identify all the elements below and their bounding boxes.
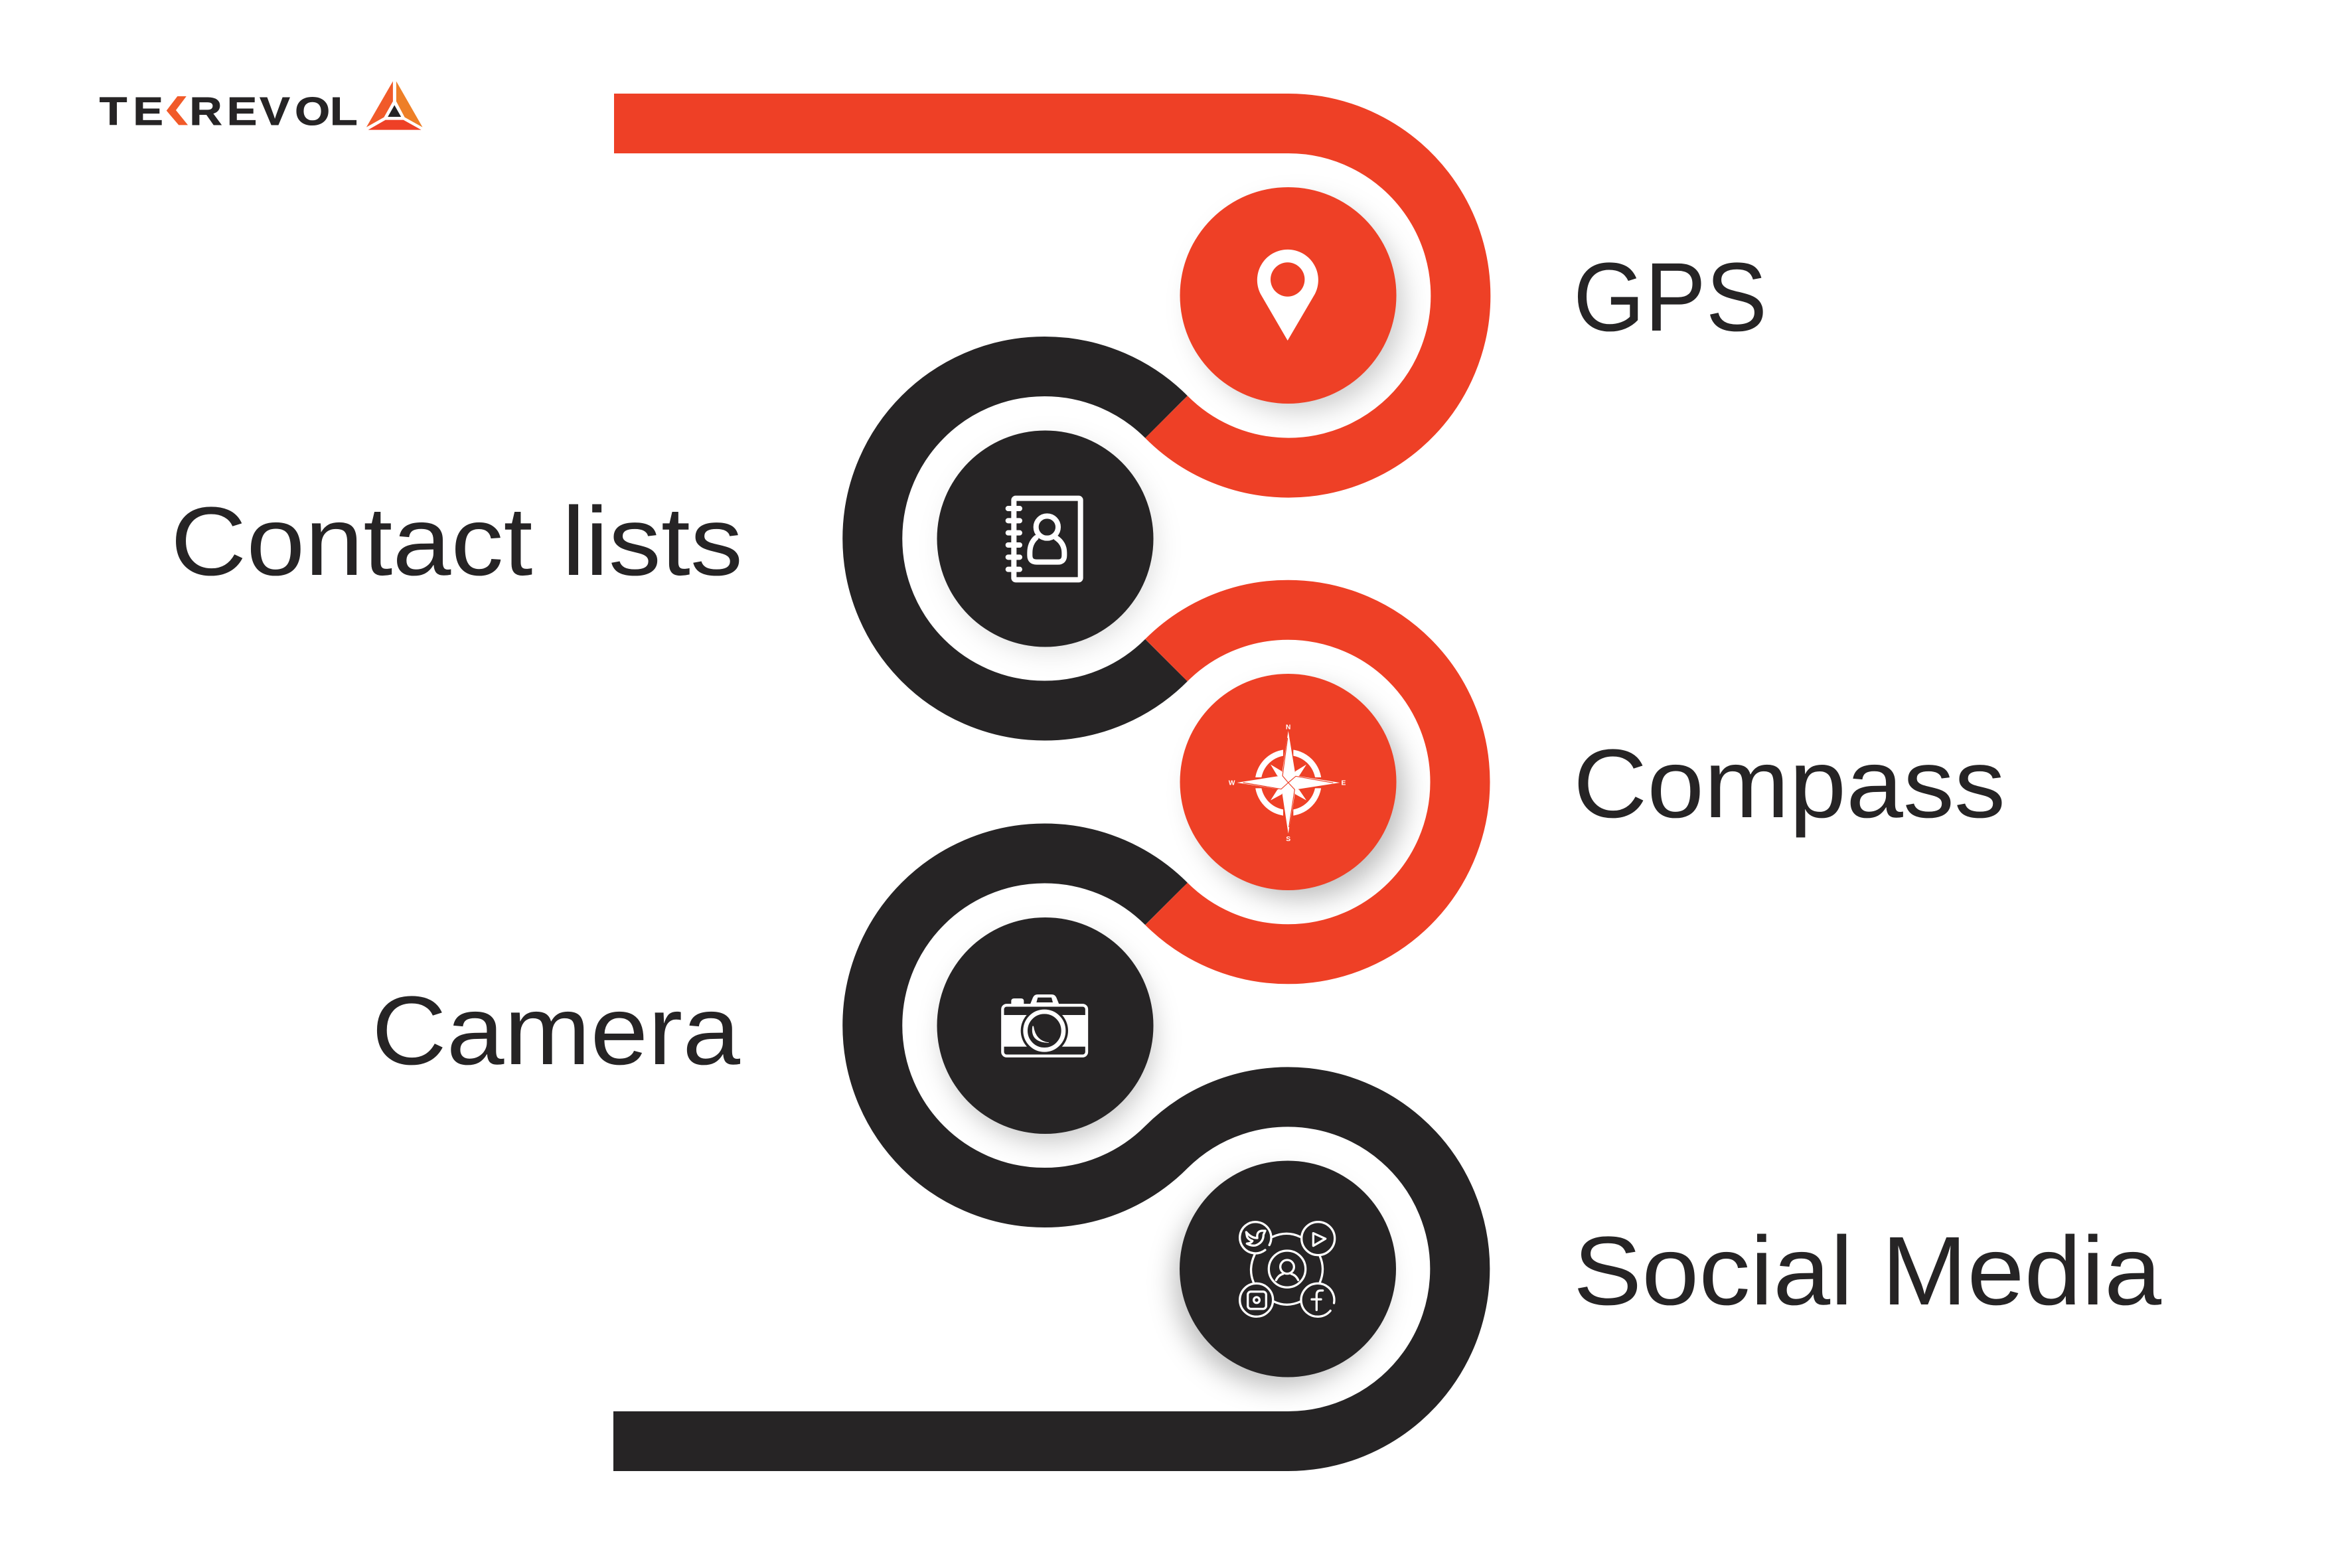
track: black segment around Contact lists bbox=[872, 366, 1166, 711]
compass letters: N bbox=[1286, 724, 1290, 732]
icon: social network bbox=[1233, 1215, 1341, 1324]
label: Compass: Compass bbox=[1573, 730, 2005, 838]
logo: TekRevol bbox=[100, 81, 423, 133]
compass letters bbox=[1229, 724, 1346, 843]
label: Camera: Camera bbox=[372, 977, 740, 1085]
compass letters: E bbox=[1342, 780, 1346, 787]
track: red segment around GPS bbox=[614, 123, 1460, 468]
node: Social Media bbox=[1180, 1160, 1396, 1377]
track: red segment around Compass bbox=[1166, 610, 1460, 954]
node: GPS bbox=[1180, 187, 1397, 404]
label: Social Media: Social Media bbox=[1573, 1217, 2161, 1326]
label: GPS: GPS bbox=[1573, 243, 1767, 352]
compass letters: S bbox=[1286, 836, 1290, 843]
node: Camera bbox=[937, 917, 1154, 1134]
compass letters: W bbox=[1229, 780, 1235, 787]
label: Contact lists: Contact lists bbox=[171, 487, 743, 596]
node: Contact lists bbox=[937, 430, 1154, 647]
circle shadows bbox=[944, 201, 1405, 1387]
icon: map pin bbox=[1257, 250, 1318, 341]
serpentine track bbox=[613, 123, 1460, 1441]
logo chevron and triangle mark bbox=[167, 81, 423, 130]
icon: compass rose bbox=[1229, 724, 1346, 843]
icon: camera bbox=[1002, 994, 1087, 1056]
logo wordmark: TEKREVOL bbox=[100, 90, 358, 133]
icon: address book bbox=[1008, 499, 1081, 580]
node: Compass bbox=[1180, 674, 1397, 890]
track: black segment around Camera and Social Media bbox=[613, 853, 1460, 1441]
